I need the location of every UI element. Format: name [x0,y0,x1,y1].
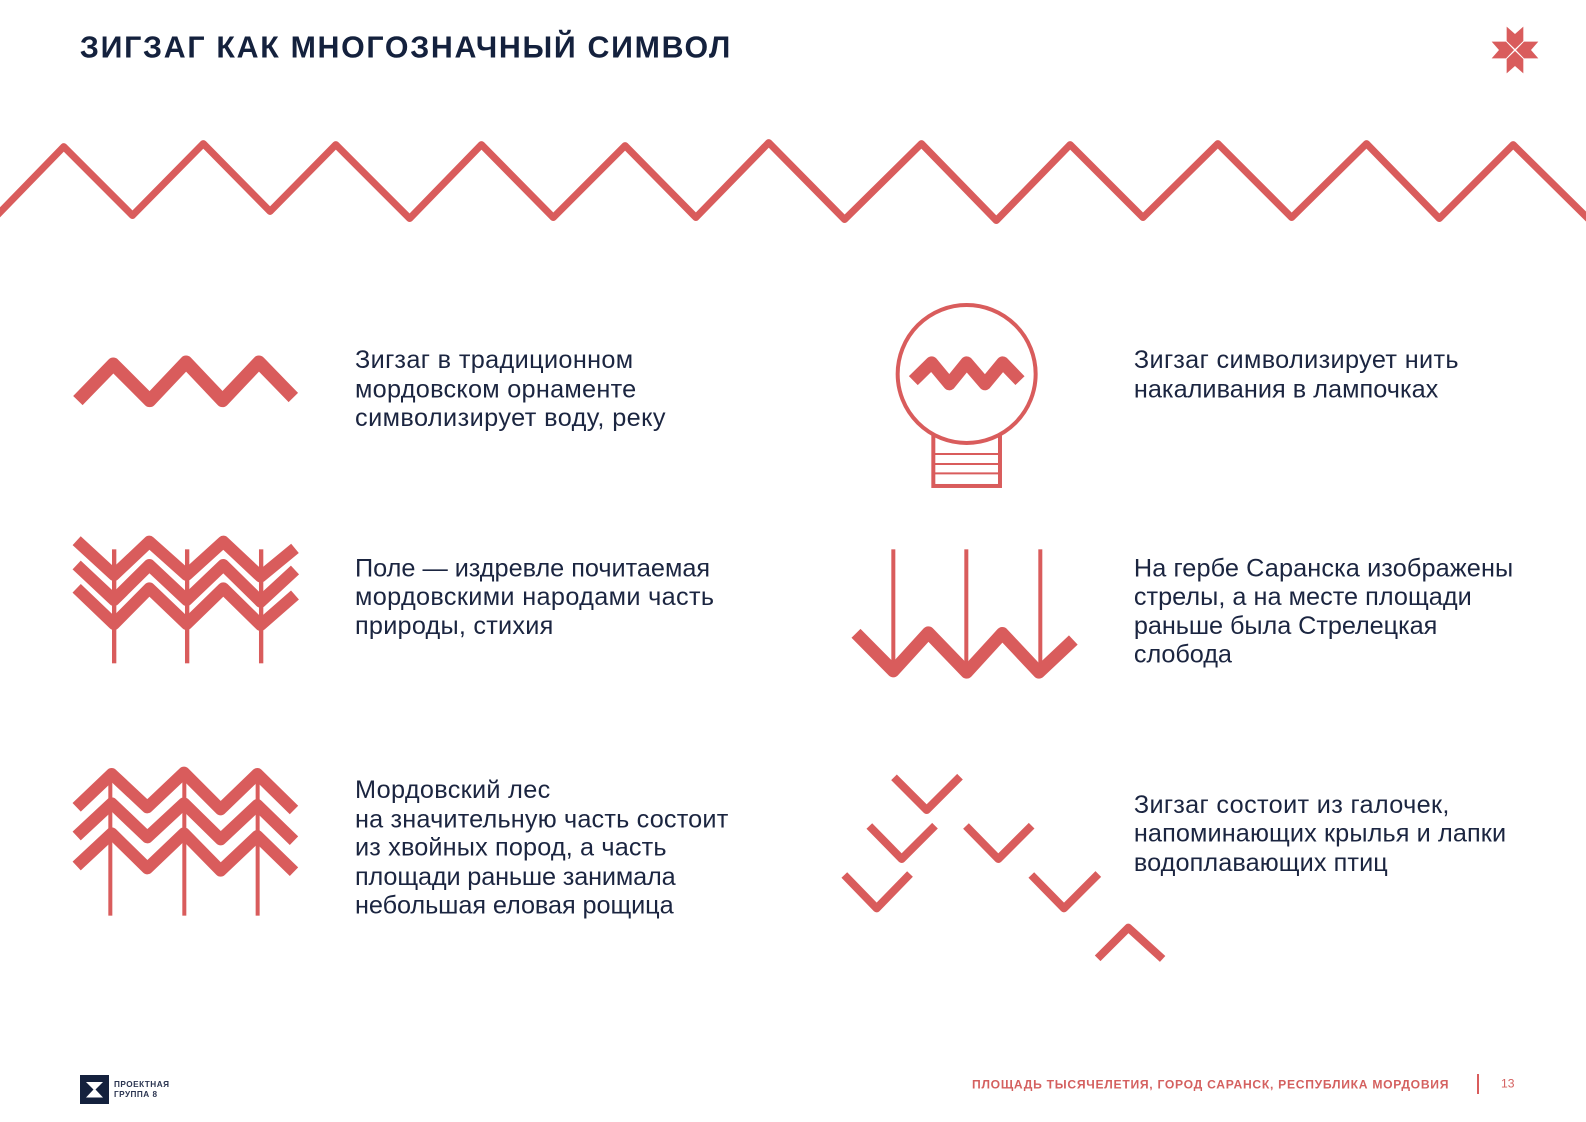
footer logo [80,1075,169,1104]
text: forest: на значительную часть состоит [355,805,729,833]
text: field: Поле — издревле почитаемая [355,555,710,583]
text: bulb: Зигзаг символизирует нить [1134,346,1459,374]
icon: arrows [856,549,1073,672]
text: forest: из хвойных пород, а часть [355,834,667,862]
icon: ornament star logo [1492,27,1538,73]
text: bulb [1134,346,1459,404]
text: water: мордовском орнаменте [355,376,636,404]
page number: 13 [1501,1076,1515,1090]
text: bulb: накаливания в лампочках [1134,376,1439,404]
text: forest [355,776,729,919]
text: arrows: стрелы, а на месте площади [1134,583,1472,611]
text: field: мордовскими народами часть [355,583,714,611]
text: birds: напоминающих крылья и лапки [1134,820,1506,848]
text: water [355,346,666,432]
icon: light bulb [898,305,1036,486]
text: forest: Мордовский лес [355,776,550,804]
text: field: природы, стихия [355,612,553,640]
icon: bird checkmarks [844,777,1163,959]
text: water: Зигзаг в традиционном [355,346,633,374]
footer logo: ПРОЕКТНАЯ [114,1080,169,1089]
text: arrows [1134,555,1513,669]
text: birds: водоплавающих птиц [1134,849,1388,877]
text: birds [1134,791,1506,877]
footer location text: ПЛОЩАДЬ ТЫСЯЧЕЛЕТИЯ, ГОРОД САРАНСК, РЕСПУБЛИКА МОРДОВИЯ [972,1077,1448,1091]
title: ЗИГЗАГ КАК МНОГОЗНАЧНЫЙ СИМВОЛ [80,31,730,65]
footer divider [1477,1074,1479,1094]
text: arrows: слобода [1134,641,1233,669]
text: birds: Зигзаг состоит из галочек, [1134,791,1449,819]
text: arrows: раньше была Стрелецкая [1134,612,1437,640]
text: forest: площади раньше занимала [355,863,677,891]
text: arrows: На гербе Саранска изображены [1134,555,1513,583]
icon: field [77,541,295,663]
large zigzag band [0,143,1586,221]
text: field [355,555,714,640]
icon: forest [77,773,294,916]
footer logo: ГРУППА 8 [114,1090,157,1099]
icon: water zigzag [78,362,293,401]
text: water: символизирует воду, реку [355,404,666,432]
text: forest: небольшая еловая рощица [355,891,675,919]
